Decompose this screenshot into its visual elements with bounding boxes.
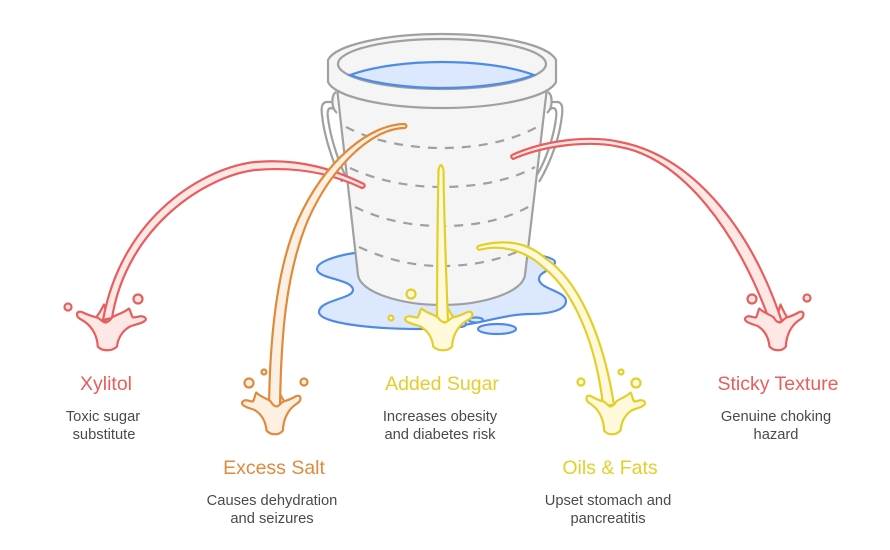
- splash front: sticky texture: [745, 308, 804, 350]
- label: excess salt: [207, 457, 337, 527]
- left handle: [322, 92, 345, 182]
- label: sticky texture: [717, 373, 839, 443]
- leak: excess salt: [242, 124, 406, 434]
- splash back: excess salt: [272, 388, 285, 406]
- leak: added sugar: [388, 165, 472, 350]
- bucket bands: [346, 127, 537, 266]
- splash front: oils and fats: [586, 392, 645, 434]
- bucket: [322, 34, 562, 305]
- leak: oils and fats: [477, 242, 645, 434]
- right handle: [537, 92, 562, 182]
- bucket rim: [328, 34, 556, 108]
- label: sticky texture: Genuine choking: [721, 409, 831, 425]
- label: oils and fats: Upset stomach and: [545, 493, 671, 509]
- label: oils and fats: pancreatitis: [570, 511, 646, 527]
- rim opening: [338, 39, 546, 89]
- label: added sugar: [383, 373, 499, 443]
- splash back: oils and fats: [602, 388, 615, 406]
- label: excess salt: Excess Salt: [223, 457, 326, 479]
- droplets: sticky texture: [748, 294, 810, 304]
- droplets: oils and fats: [578, 370, 640, 388]
- stream: xylitol: [103, 161, 365, 320]
- bucket body: [337, 88, 547, 305]
- splash back: xylitol: [95, 304, 110, 322]
- label: oils and fats: Oils & Fats: [562, 457, 658, 479]
- label: oils and fats: [545, 457, 671, 527]
- label: sticky texture: hazard: [754, 427, 798, 443]
- splash front: xylitol: [77, 308, 146, 350]
- label: excess salt: Causes dehydration: [207, 493, 337, 509]
- splash back: sticky texture: [775, 304, 788, 322]
- droplets: excess salt: [244, 370, 308, 388]
- stream: oils and fats: [477, 242, 614, 405]
- label: xylitol: substitute: [73, 427, 135, 443]
- label: sticky texture: Sticky Texture: [717, 373, 839, 395]
- water surface: [350, 62, 534, 88]
- puddle: [317, 253, 566, 334]
- stream: sticky texture: [511, 139, 782, 322]
- label: added sugar: Added Sugar: [385, 373, 499, 395]
- stream: excess salt: [269, 124, 406, 407]
- label: added sugar: and diabetes risk: [384, 427, 496, 443]
- splash back: added sugar: [440, 304, 455, 322]
- leak: xylitol: [64, 161, 365, 350]
- splash front: added sugar: [405, 308, 472, 350]
- label: xylitol: Xylitol: [80, 373, 132, 395]
- droplets: xylitol: [64, 294, 142, 310]
- label: xylitol: [66, 373, 140, 443]
- droplets: added sugar: [388, 290, 416, 320]
- leak: sticky texture: [511, 139, 810, 350]
- splash front: excess salt: [242, 392, 300, 434]
- stream: added sugar: [437, 165, 448, 322]
- label: added sugar: Increases obesity: [383, 409, 498, 425]
- label: xylitol: Toxic sugar: [66, 409, 140, 425]
- label: excess salt: and seizures: [230, 511, 314, 527]
